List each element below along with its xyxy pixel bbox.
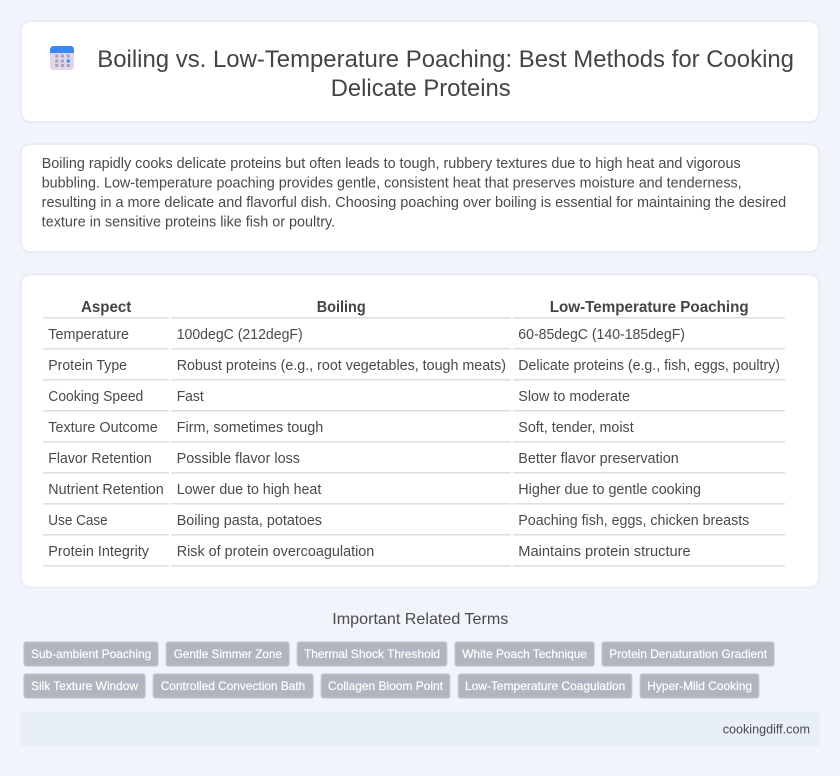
table row: protein type: Protein Type bbox=[48, 358, 127, 374]
table header row: Aspect bbox=[81, 299, 132, 316]
table row: flavor retention: Better flavor preservation bbox=[518, 451, 679, 467]
tag: gentle simmer zone bbox=[166, 642, 289, 666]
table row: flavor retention bbox=[43, 451, 785, 474]
tag: low-temperature coagulation bbox=[458, 674, 632, 698]
table row: use case bbox=[43, 513, 785, 536]
table header row: Boiling bbox=[317, 299, 366, 316]
table row: cooking speed bbox=[43, 389, 785, 412]
icon: calendar bbox=[50, 46, 74, 70]
table row: temperature: Temperature bbox=[48, 327, 129, 343]
title bbox=[97, 46, 794, 102]
panel: introduction bbox=[21, 144, 819, 252]
table row: use case: Use Case bbox=[48, 513, 108, 529]
table row: flavor retention: Possible flavor loss bbox=[177, 451, 300, 467]
table header row bbox=[43, 299, 785, 319]
tag: controlled convection bath bbox=[153, 674, 313, 698]
footer: cookingdiff.com bbox=[723, 722, 810, 736]
heading: important related terms: Important Related Terms bbox=[332, 611, 508, 628]
table row: protein type: Delicate proteins (e.g., fish, eggs, poultry) bbox=[518, 358, 780, 374]
table row: protein integrity: Maintains protein structure bbox=[518, 544, 691, 560]
panel: header bbox=[21, 21, 819, 122]
tag: collagen bloom point: Collagen Bloom Point bbox=[328, 679, 444, 693]
table row: flavor retention: Flavor Retention bbox=[48, 451, 152, 467]
tag: silk texture window: Silk Texture Window bbox=[31, 679, 138, 693]
table row: nutrient retention: Nutrient Retention bbox=[48, 482, 164, 498]
table row: protein integrity: Protein Integrity bbox=[48, 544, 150, 560]
panel: comparison table bbox=[21, 274, 819, 588]
panel: related term tags bbox=[24, 642, 774, 698]
tag: hyper-mild cooking bbox=[640, 674, 759, 698]
table row: texture outcome: Texture Outcome bbox=[48, 420, 158, 436]
text block: introduction paragraph: texture in sensitive proteins like fish or poultry. bbox=[42, 214, 335, 230]
table row: protein integrity: Risk of protein overcoagulation bbox=[177, 544, 374, 560]
tag: white poach technique: White Poach Technique bbox=[462, 647, 587, 661]
table row: temperature: 100degC (212degF) bbox=[177, 327, 303, 343]
tag: protein denaturation gradient: Protein Denaturation Gradient bbox=[609, 647, 768, 661]
tag: silk texture window bbox=[24, 674, 145, 698]
table row: cooking speed: Cooking Speed bbox=[48, 389, 143, 405]
text block: introduction paragraph: bubbling. Low-temperature poaching provides gentle, consistent heat that preserves moisture and tenderness, bbox=[42, 176, 742, 192]
table row: temperature: 60-85degC (140-185degF) bbox=[518, 327, 685, 343]
tag: thermal shock threshold bbox=[297, 642, 447, 666]
tag: hyper-mild cooking: Hyper-Mild Cooking bbox=[647, 679, 752, 693]
tag: white poach technique bbox=[455, 642, 594, 666]
table row: cooking speed: Fast bbox=[177, 389, 204, 405]
table row: texture outcome: Soft, tender, moist bbox=[518, 420, 634, 436]
table row: protein type: Robust proteins (e.g., root vegetables, tough meats) bbox=[177, 358, 506, 374]
tag: sub-ambient poaching bbox=[24, 642, 158, 666]
tag: low-temperature coagulation: Low-Temperature Coagulation bbox=[465, 679, 625, 693]
title: Boiling vs. Low-Temperature Poaching: Best Methods for Cooking bbox=[97, 46, 794, 73]
table row: use case: Boiling pasta, potatoes bbox=[177, 513, 322, 529]
tag: collagen bloom point bbox=[321, 674, 450, 698]
table row: texture outcome: Firm, sometimes tough bbox=[177, 420, 323, 436]
table row: nutrient retention: Lower due to high heat bbox=[177, 482, 321, 498]
table header row: Low-Temperature Poaching bbox=[550, 299, 749, 316]
table row: nutrient retention bbox=[43, 482, 785, 505]
table row: temperature bbox=[43, 327, 785, 350]
tag: gentle simmer zone: Gentle Simmer Zone bbox=[174, 647, 282, 661]
text block: introduction paragraph: resulting in a more delicate and flavorful dish. Choosing poaching over boiling is essential for maintaining the desired bbox=[42, 195, 786, 211]
tag: sub-ambient poaching: Sub-ambient Poaching bbox=[31, 647, 151, 661]
title: Delicate Proteins bbox=[331, 75, 511, 102]
tag: protein denaturation gradient bbox=[602, 642, 774, 666]
table row: use case: Poaching fish, eggs, chicken breasts bbox=[518, 513, 749, 529]
text block: introduction paragraph bbox=[42, 156, 786, 230]
table row: protein integrity bbox=[43, 544, 785, 567]
table row: texture outcome bbox=[43, 420, 785, 443]
table row: protein type bbox=[43, 358, 785, 381]
table row: cooking speed: Slow to moderate bbox=[518, 389, 630, 405]
text block: introduction paragraph: Boiling rapidly cooks delicate proteins but often leads to tough, rubbery textures due to high heat and vigorous bbox=[42, 156, 741, 172]
tag: controlled convection bath: Controlled Convection Bath bbox=[161, 679, 305, 693]
footer bbox=[20, 712, 820, 746]
tag: thermal shock threshold: Thermal Shock Threshold bbox=[304, 647, 440, 661]
table row: nutrient retention: Higher due to gentle cooking bbox=[518, 482, 701, 498]
